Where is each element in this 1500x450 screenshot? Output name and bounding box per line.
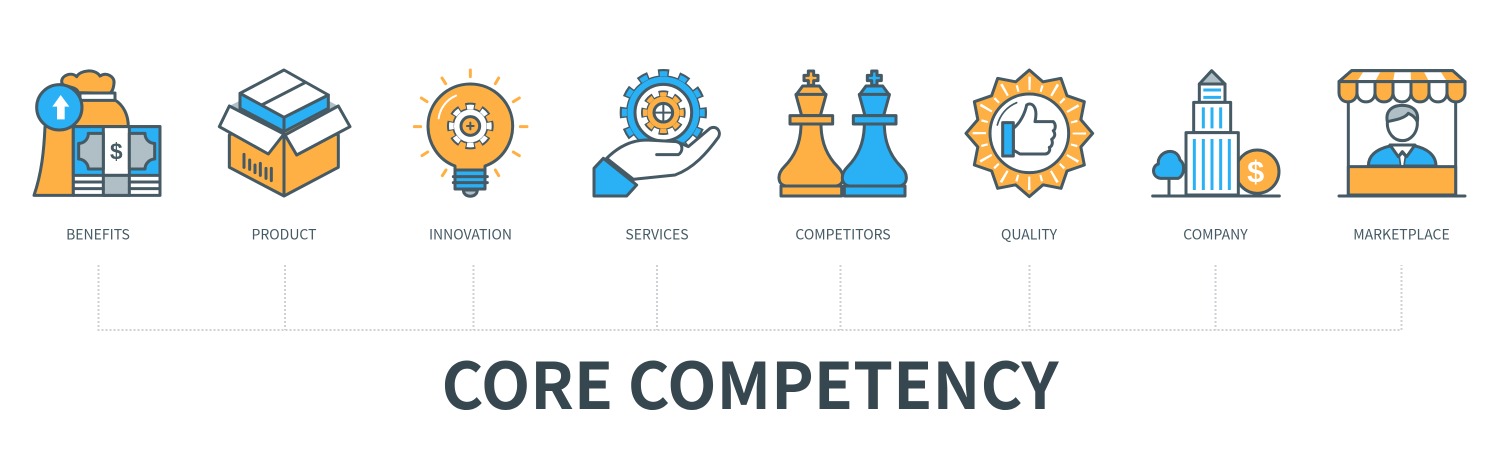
icon: benefits money bag and cash (34, 71, 160, 195)
icon: company building and coin (1153, 71, 1279, 196)
icon: marketplace stall with seller (1339, 71, 1465, 196)
label: benefits: BENEFITS (66, 224, 130, 244)
label: services: SERVICES (625, 224, 689, 244)
label: product: PRODUCT (252, 224, 316, 244)
orange king (779, 71, 843, 196)
icon: benefits money bag and cash: $ (110, 138, 123, 164)
icon: product box (219, 70, 350, 196)
label: marketplace: MARKETPLACE (1353, 224, 1450, 244)
label: innovation: INNOVATION (429, 224, 512, 244)
blue king (842, 71, 906, 196)
label: company: COMPANY (1183, 224, 1248, 244)
label: competitors: COMPETITORS (795, 224, 891, 244)
icon: innovation light bulb (414, 70, 527, 196)
icon: competitors chess kings (779, 71, 906, 196)
icon: services gear in hand (594, 73, 719, 196)
label: quality: QUALITY (1001, 224, 1058, 244)
icon: quality badge with thumbs up (966, 70, 1093, 197)
dotted connector bracket (98, 265, 1402, 330)
title: CORE COMPETENCY (441, 336, 1059, 428)
icon: company building and coin: $ (1247, 155, 1264, 189)
labels (66, 224, 1450, 244)
